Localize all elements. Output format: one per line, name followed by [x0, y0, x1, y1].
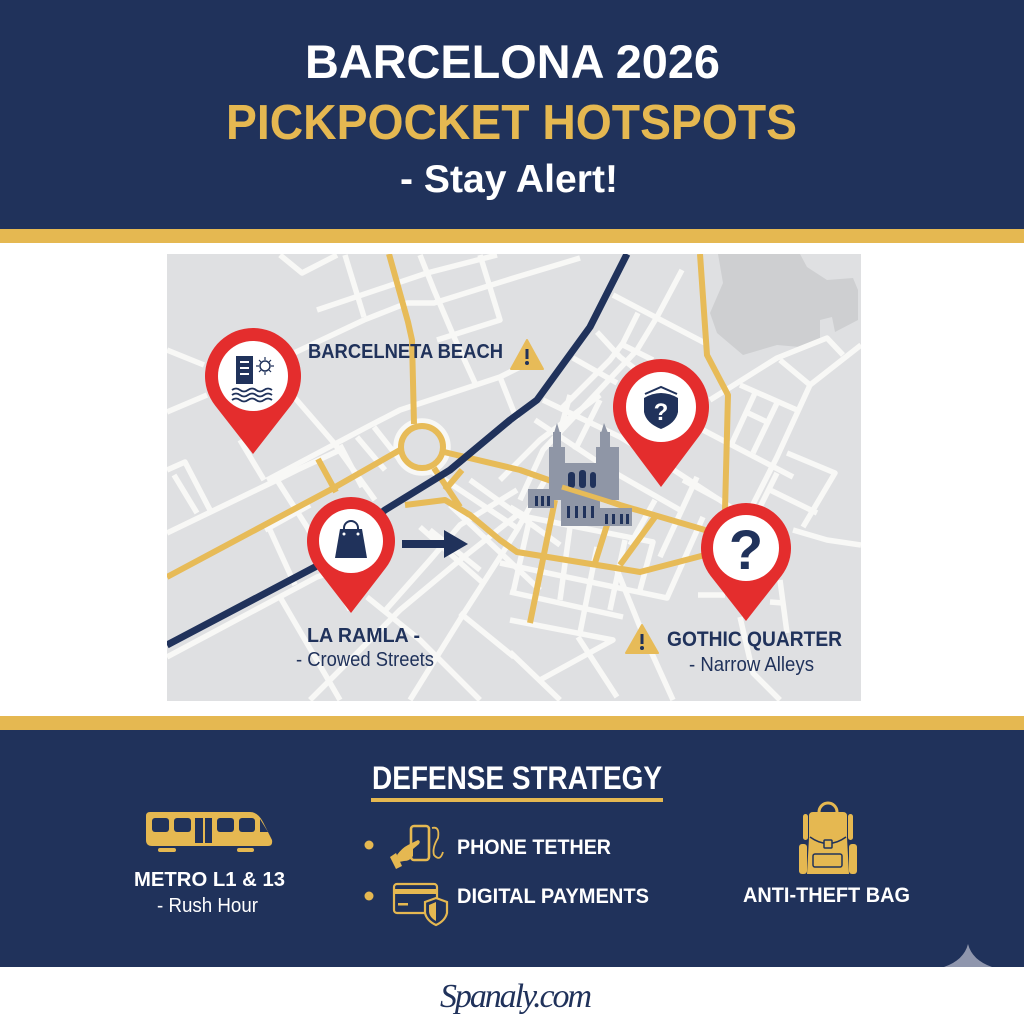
label: metro: METRO L1 & 13: [134, 868, 285, 891]
label: Barceloneta beach: BARCELNETA BEACH: [308, 340, 503, 363]
icon: shopping bag: [335, 521, 367, 558]
yellow road over cathedral: [562, 487, 620, 505]
map panel: [167, 254, 861, 701]
label: digital payments: DIGITAL PAYMENTS: [457, 885, 649, 908]
heading: defense strategy: DEFENSE STRATEGY: [372, 760, 662, 796]
icon: backpack: [799, 803, 857, 874]
icon: card and shield: [394, 884, 447, 925]
icon: warning triangle: [626, 625, 658, 653]
label: anti-theft bag: ANTI-THEFT BAG: [743, 884, 910, 907]
icon: metro train: [146, 812, 272, 852]
decorative corner mark: [944, 944, 992, 967]
title line 2: PICKPOCKET HOTSPOTS: [226, 96, 797, 150]
metro line: [167, 254, 627, 645]
park area: [710, 254, 858, 355]
label: La Ramla: [296, 628, 434, 666]
icon: beach hotel: [232, 356, 274, 402]
label: La Ramla: - Crowed Streets: [296, 649, 434, 671]
label: Gothic Quarter: GOTHIC QUARTER: [667, 628, 842, 651]
label: metro: [134, 868, 285, 917]
icon: question mark: ?: [729, 518, 763, 581]
label: Gothic Quarter: [667, 628, 842, 676]
label: phone tether: PHONE TETHER: [457, 836, 611, 859]
arrow: [402, 530, 468, 558]
main yellow roads: [167, 254, 728, 623]
pin: Barceloneta beach: [205, 328, 301, 454]
street network: [167, 255, 861, 700]
roundabout: [401, 426, 443, 468]
bullet: [364, 892, 374, 900]
pin: question mark: [701, 503, 791, 621]
brand signature: Spanaly.com: [440, 978, 592, 1015]
cathedral landmark: [528, 423, 632, 526]
pin: La Ramla: [307, 497, 395, 613]
pin: shield: [613, 359, 709, 487]
footer panel: [0, 716, 1024, 967]
icon: phone tether: [390, 826, 443, 869]
label: La Ramla: LA RAMLA -: [307, 624, 420, 647]
title line 1: BARCELONA 2026: [305, 35, 720, 88]
header banner: [0, 0, 1024, 243]
icon: shield with question mark: ?: [654, 399, 668, 426]
label: metro: - Rush Hour: [157, 895, 258, 917]
title line 3: - Stay Alert!: [400, 158, 618, 201]
icon: warning triangle: [511, 340, 543, 369]
label: Gothic Quarter: - Narrow Alleys: [689, 654, 814, 676]
bullet: [364, 840, 374, 850]
